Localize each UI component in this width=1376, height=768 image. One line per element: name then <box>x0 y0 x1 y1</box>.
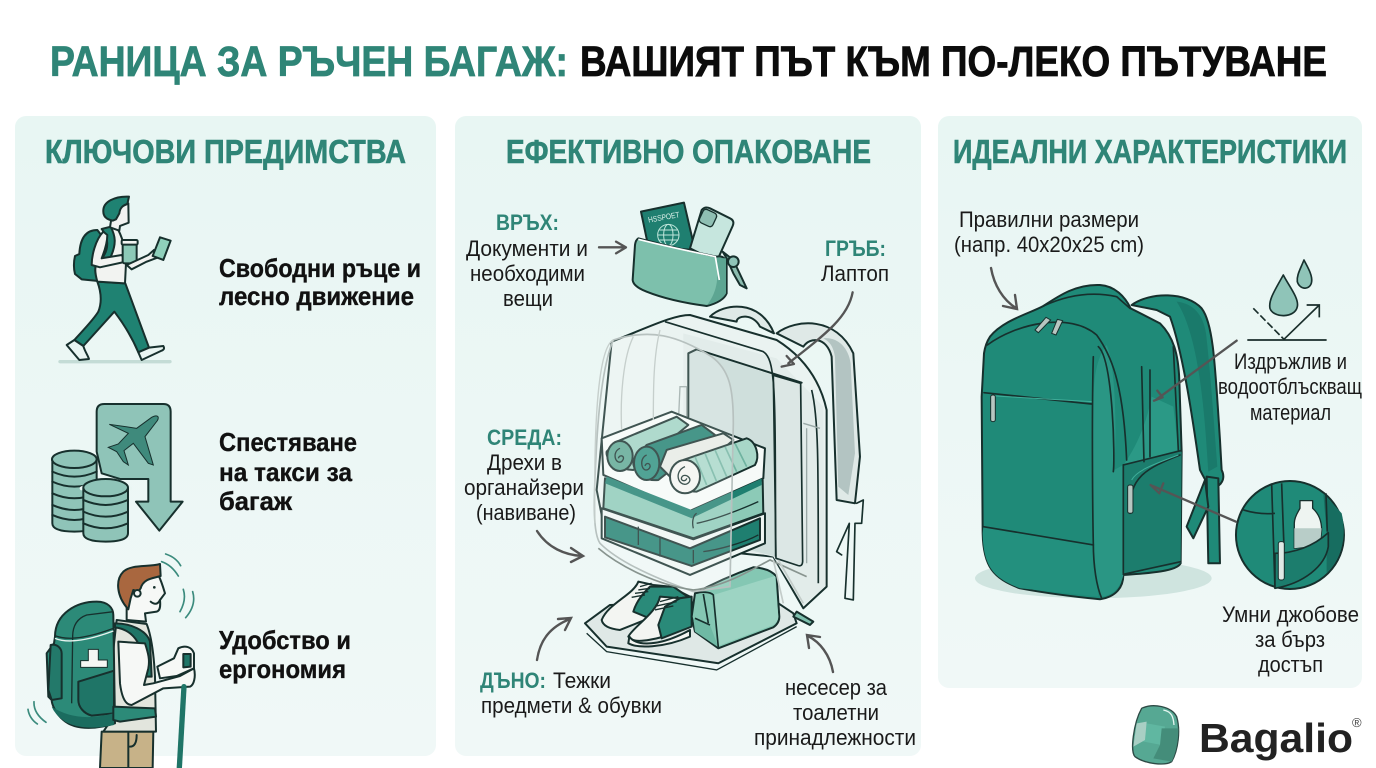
label: middle: органайзери <box>464 475 584 500</box>
shoulder strap <box>1132 295 1223 487</box>
shoes <box>602 582 690 630</box>
title <box>50 38 1327 86</box>
panel: key benefits <box>15 116 436 768</box>
label: right dimensions <box>954 207 1144 257</box>
arrow: toiletry <box>807 635 833 672</box>
logo: Bagalio <box>1133 706 1362 764</box>
title: РАНИЦА ЗА РЪЧЕН БАГАЖ: <box>50 38 568 86</box>
label: middle: Дрехи в <box>487 450 562 475</box>
illustration: packed open backpack <box>585 203 863 670</box>
benefit text: baggage fees: на такси за <box>219 457 352 487</box>
benefit text: baggage fees: багаж <box>219 486 293 516</box>
toiletry and shoes on bottom tray <box>585 600 797 663</box>
back shell <box>597 315 827 608</box>
illustration: green backpack <box>975 285 1223 599</box>
zips <box>991 317 1133 513</box>
arrow: bottom <box>537 618 571 660</box>
label: bottom: Тежки <box>553 668 611 693</box>
arrow: middle <box>537 531 583 562</box>
logo: Bagalio: Bagalio <box>1199 715 1353 761</box>
label: top: ВРЪХ: <box>496 210 559 235</box>
label: material: Издръжлив и <box>1234 349 1347 374</box>
benefit text: comfort: Удобство и <box>219 625 351 655</box>
label: material: материал <box>1250 400 1331 425</box>
label: back: Лаптоп <box>821 261 889 286</box>
label: middle: СРЕДА: <box>487 425 562 450</box>
label: bottom: предмети & обувки <box>481 693 662 718</box>
label: right dimensions: (напр. 40x20x25 cm) <box>954 232 1144 257</box>
icon: pouch with passport, phone and keys: HSSPOET <box>647 210 680 225</box>
benefit text: free hands: Свободни ръце и <box>219 253 421 283</box>
benefit text: free hands <box>219 253 421 311</box>
icon: water repellent <box>1247 260 1327 340</box>
label: bottom: ДЪНО: <box>480 668 546 693</box>
body <box>982 285 1182 599</box>
label: top: Документи и <box>466 236 588 261</box>
heading: key benefits: КЛЮЧОВИ ПРЕДИМСТВА <box>45 133 406 170</box>
label: smart pockets: достъп <box>1258 652 1323 677</box>
arrows: packing callouts <box>599 242 853 367</box>
panel: ideal characteristics <box>938 116 1362 688</box>
benefit text: comfort: ергономия <box>219 654 346 684</box>
icon: pouch with passport, phone and keys <box>633 203 747 306</box>
label: toiletry bag: тоалетни <box>793 700 879 725</box>
label: toiletry bag <box>754 675 916 750</box>
folded clothes stack <box>603 478 763 538</box>
label: top <box>466 210 588 311</box>
benefit text: comfort <box>219 625 351 684</box>
icon: coins and plane with down arrow <box>52 404 183 542</box>
pouch <box>692 567 779 648</box>
label: top: необходими <box>470 261 585 286</box>
label: smart pockets: за бърз <box>1255 627 1325 652</box>
label: back: ГРЪБ: <box>825 236 886 261</box>
label: middle: (навиване) <box>476 500 576 525</box>
rolled clothes tray <box>602 412 765 512</box>
logo: Bagalio: ® <box>1352 715 1362 730</box>
label: middle <box>464 425 584 525</box>
arrow: material <box>1154 341 1237 401</box>
strap and handle <box>710 307 774 333</box>
transparent front shell <box>594 334 733 592</box>
icon: pocket detail with bottle <box>1236 481 1344 589</box>
label: toiletry bag: несесер за <box>785 675 888 700</box>
label: bottom <box>480 668 662 718</box>
label: smart pockets <box>1222 602 1359 677</box>
icon: hiker with backpack <box>28 554 195 768</box>
label: material <box>1218 349 1362 425</box>
label: back <box>821 236 889 286</box>
label: toiletry bag: принадлежности <box>754 725 916 750</box>
icon: walking traveller <box>58 197 172 363</box>
label: smart pockets: Умни джобове <box>1222 602 1359 627</box>
benefit text: baggage fees <box>219 427 357 516</box>
label: top: вещи <box>503 286 553 311</box>
heading: efficient packing: ЕФЕКТИВНО ОПАКОВАНЕ <box>506 133 871 170</box>
laptop <box>773 375 803 566</box>
arrow: dimensions <box>991 268 1017 309</box>
label: right dimensions: Правилни размери <box>959 207 1139 232</box>
panel: efficient packing <box>455 116 921 756</box>
benefit text: free hands: лесно движение <box>219 281 414 311</box>
arrow: pockets <box>1151 483 1236 522</box>
benefit text: baggage fees: Спестяване <box>219 427 357 457</box>
